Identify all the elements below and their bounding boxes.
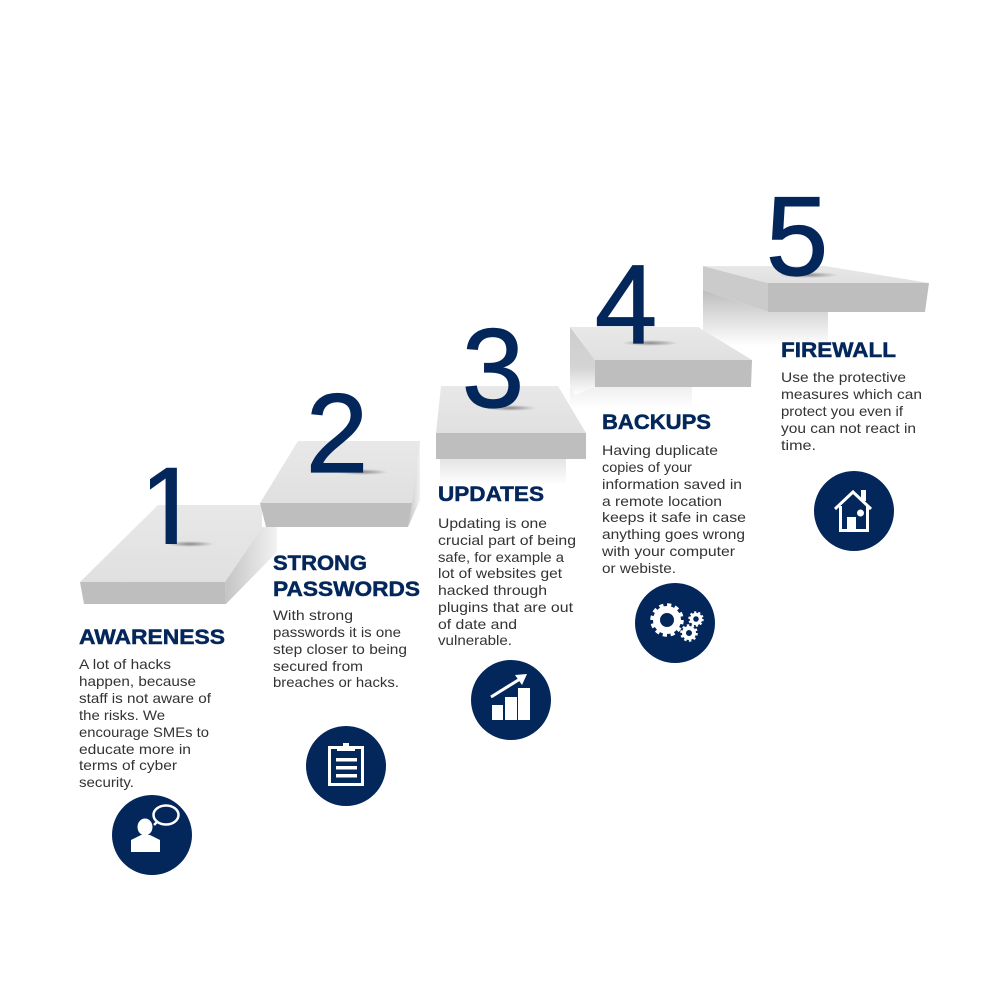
text: backups: Having duplicate bbox=[602, 442, 718, 458]
text: awareness: happen, because bbox=[79, 673, 196, 689]
text: updates: hacked through bbox=[438, 582, 547, 598]
text: backups: copies of your bbox=[602, 459, 692, 475]
text: firewall bbox=[781, 369, 922, 453]
text: strong passwords: step closer to being bbox=[273, 641, 407, 657]
text: awareness: security. bbox=[79, 774, 134, 790]
icon: clipboard bbox=[306, 726, 386, 806]
step 5: platform bbox=[703, 266, 929, 346]
number 3: 3 bbox=[462, 306, 524, 431]
text: backups: anything goes wrong bbox=[602, 526, 745, 542]
step 2: platform bbox=[260, 441, 420, 527]
text: strong passwords: breaches or hacks. bbox=[273, 674, 399, 690]
text: updates: lot of websites get bbox=[438, 565, 562, 581]
text: firewall: you can not react in bbox=[781, 420, 916, 436]
icon: house bbox=[814, 471, 894, 551]
step 4: platform bbox=[570, 327, 752, 409]
step 1: platform bbox=[80, 505, 277, 604]
step 3: platform bbox=[436, 386, 586, 485]
text: firewall: time. bbox=[781, 437, 816, 453]
heading: backups: BACKUPS bbox=[602, 411, 711, 434]
icon: rising bar chart bbox=[471, 660, 551, 740]
text: awareness: A lot of hacks bbox=[79, 656, 171, 672]
text: awareness: encourage SMEs to bbox=[79, 724, 209, 740]
text: updates: plugins that are out bbox=[438, 599, 573, 615]
text: backups: with your computer bbox=[601, 543, 735, 559]
text: strong passwords: secured from bbox=[273, 658, 363, 674]
heading: firewall: FIREWALL bbox=[781, 339, 896, 362]
text: firewall: protect you even if bbox=[781, 403, 903, 419]
text: strong passwords: passwords it is one bbox=[273, 624, 401, 640]
text: updates: Updating is one bbox=[438, 515, 547, 531]
text: updates bbox=[438, 515, 576, 648]
text: backups: or webiste. bbox=[602, 560, 676, 576]
text: firewall: Use the protective bbox=[781, 369, 906, 385]
heading: updates: UPDATES bbox=[438, 483, 544, 506]
number 4: 4 bbox=[595, 242, 657, 367]
heading: strong passwords: PASSWORDS bbox=[273, 578, 420, 601]
text: backups: keeps it safe in case bbox=[602, 509, 746, 525]
icon: gears bbox=[635, 583, 715, 663]
text: backups: a remote location bbox=[602, 493, 722, 509]
text: updates: crucial part of being bbox=[438, 532, 576, 548]
number 1: 1 bbox=[133, 441, 205, 584]
text: strong passwords bbox=[273, 607, 407, 690]
text: updates: vulnerable. bbox=[438, 632, 512, 648]
text: backups: information saved in bbox=[602, 476, 742, 492]
text: awareness: staff is not aware of bbox=[79, 690, 211, 706]
text: awareness: terms of cyber bbox=[79, 757, 177, 773]
heading: strong passwords: STRONG bbox=[273, 552, 367, 575]
text: strong passwords: With strong bbox=[273, 607, 353, 623]
number 5: 5 bbox=[766, 174, 828, 299]
text: awareness: the risks. We bbox=[79, 707, 165, 723]
text: firewall: measures which can bbox=[781, 386, 922, 402]
number 2: 2 bbox=[306, 371, 368, 496]
heading: strong passwords bbox=[273, 552, 420, 601]
heading: awareness: AWARENESS bbox=[79, 626, 225, 649]
text: updates: safe, for example a bbox=[438, 549, 564, 565]
text: backups bbox=[601, 442, 746, 576]
icon: person with speech bubble bbox=[112, 795, 192, 875]
text: awareness: educate more in bbox=[79, 741, 191, 757]
text: updates: of date and bbox=[438, 616, 517, 632]
text: awareness bbox=[79, 656, 211, 790]
